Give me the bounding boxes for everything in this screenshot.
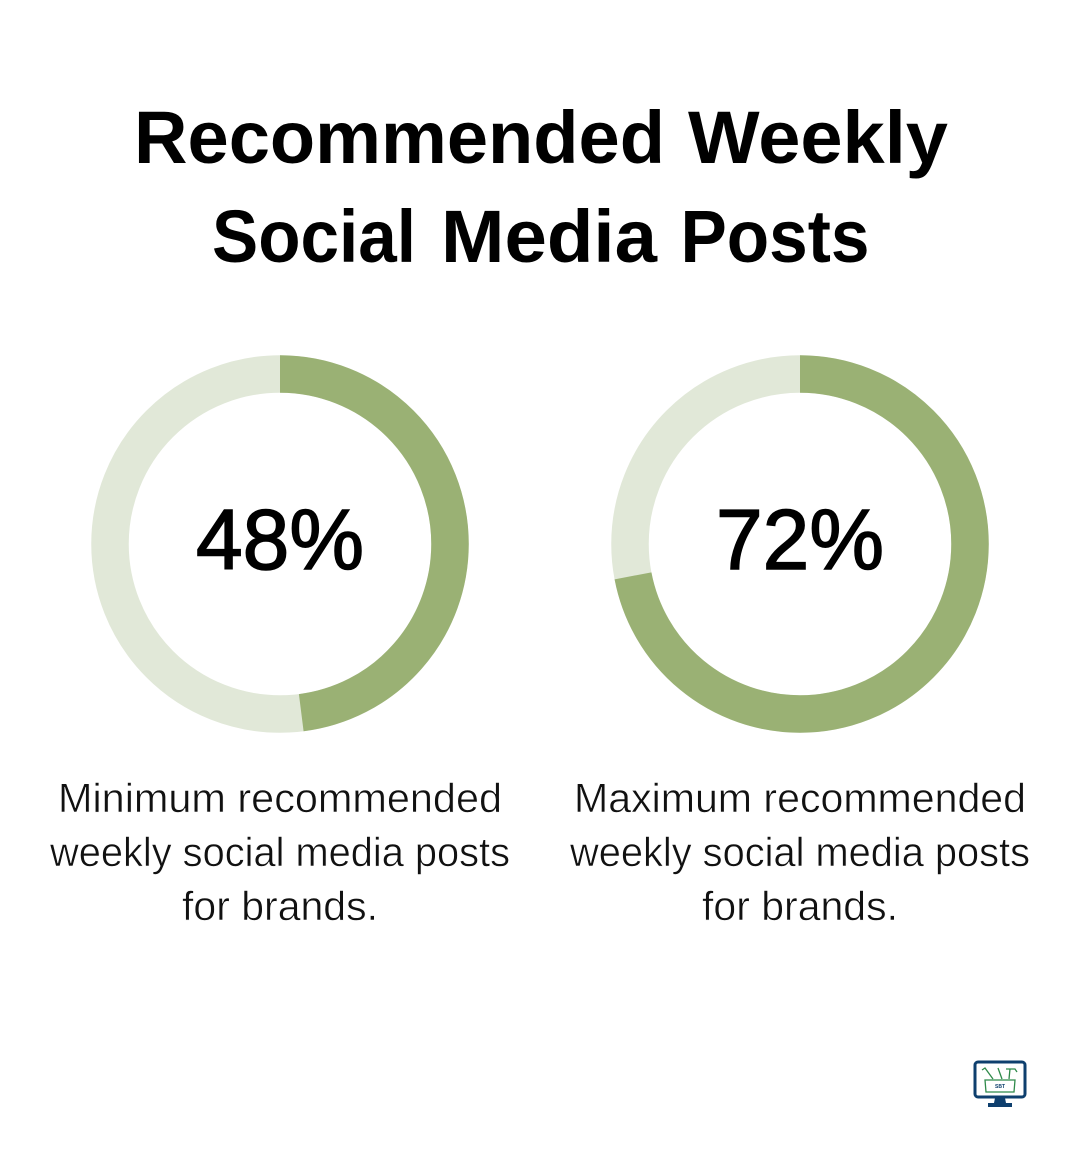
caption: minimum: for brands.	[182, 883, 378, 929]
title: Recommended	[134, 96, 665, 179]
title: Social	[212, 195, 416, 278]
title: Media	[441, 195, 658, 278]
caption: maximum: weekly social media posts	[569, 829, 1030, 875]
panel: minimum	[49, 374, 510, 929]
icon: monitor logo with toolbox	[975, 1062, 1025, 1107]
donut chart: 48%	[110, 374, 450, 714]
title: Posts	[680, 195, 870, 278]
title: Weekly	[688, 96, 948, 179]
donut chart: 72%	[630, 374, 970, 714]
caption: maximum: Maximum recommended	[574, 775, 1026, 821]
value: 48%: 48%	[196, 493, 364, 588]
caption: minimum	[49, 775, 510, 929]
caption: minimum: Minimum recommended	[58, 775, 502, 821]
caption: maximum: for brands.	[702, 883, 898, 929]
caption: minimum: weekly social media posts	[49, 829, 510, 875]
icon: monitor logo with toolbox: SBT	[995, 1084, 1005, 1090]
caption: maximum	[569, 775, 1030, 929]
value: 72%: 72%	[716, 493, 884, 588]
panel: maximum	[569, 374, 1030, 929]
title	[134, 96, 948, 278]
